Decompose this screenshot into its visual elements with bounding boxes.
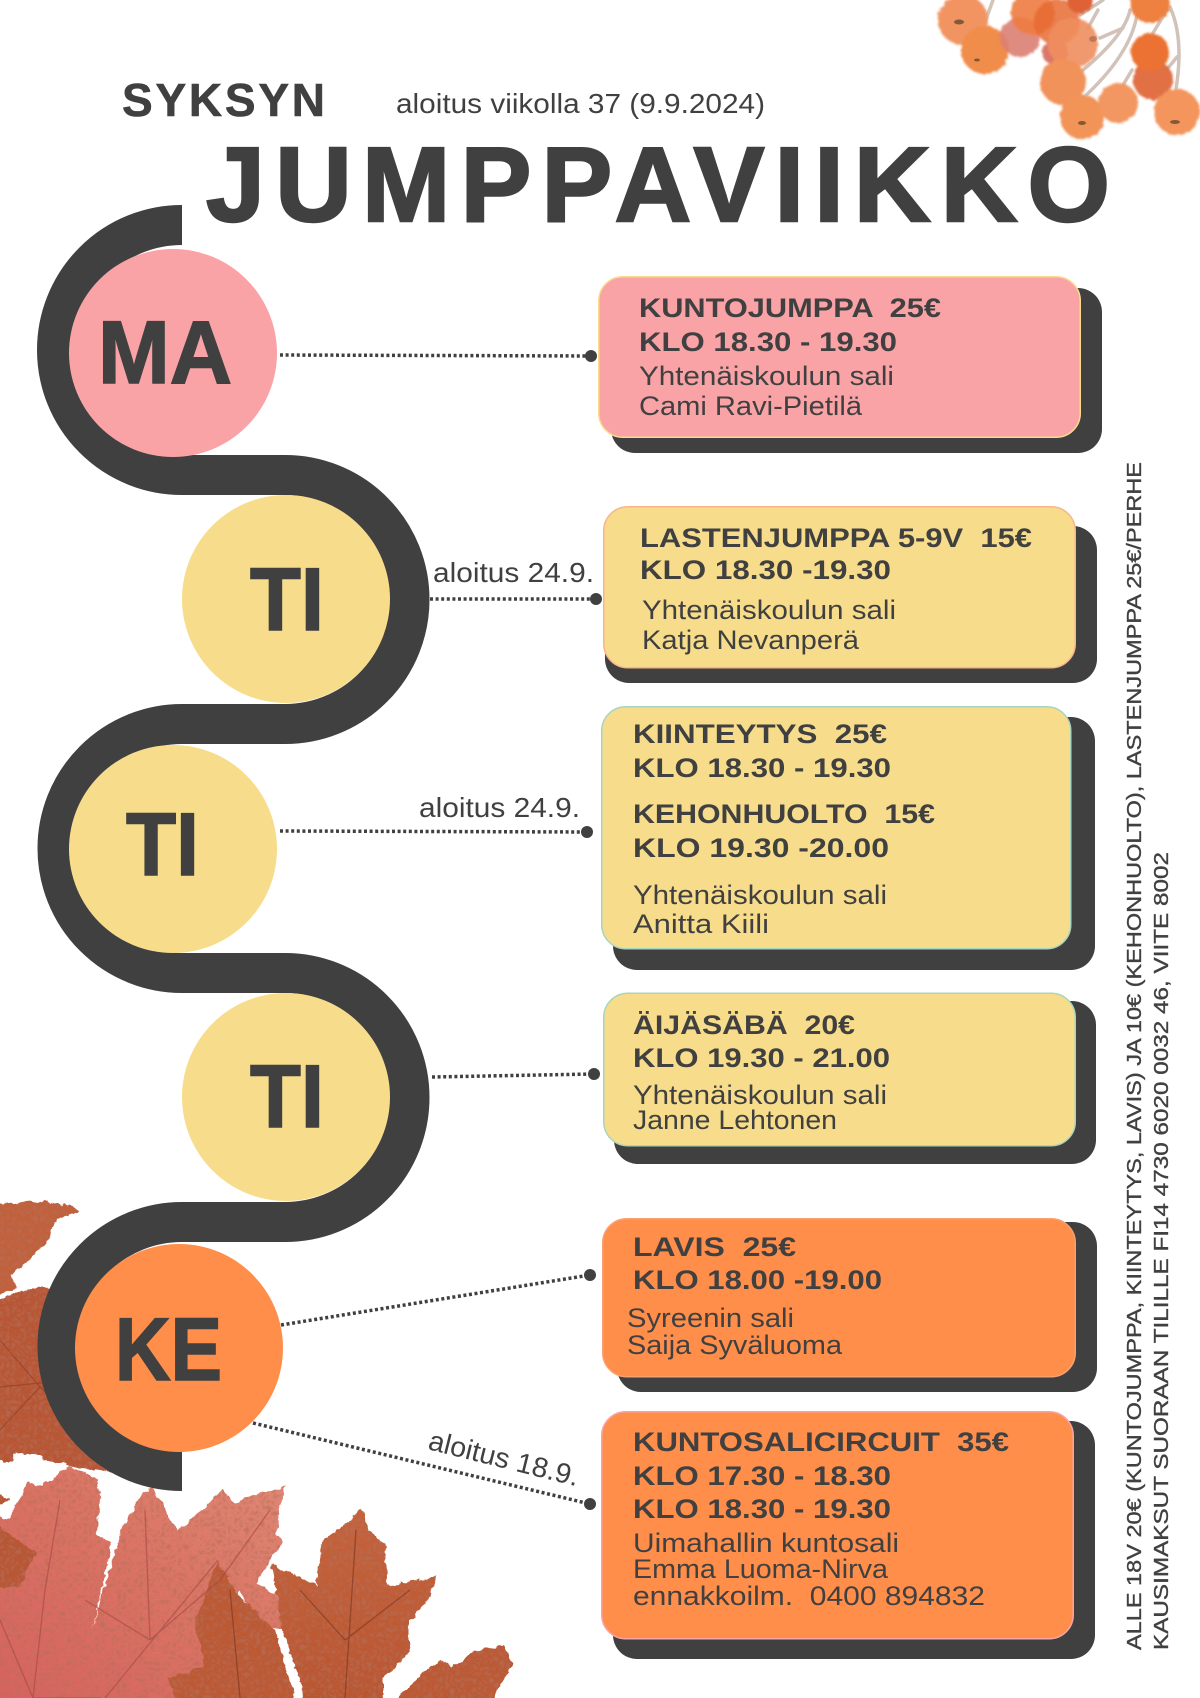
panel: kiinteytys ja kehonhuolto: Yhtenäiskoulun sali [633, 880, 887, 910]
day circle: TI third [182, 993, 390, 1201]
connector: MA to kuntojumppa [280, 350, 597, 362]
day circle: TI first [182, 495, 390, 703]
panel: kuntosalicircuit: KUNTOSALICIRCUIT 35€ [633, 1427, 1009, 1457]
panel: lastenjumppa: KLO 18.30 -19.30 [640, 555, 891, 585]
start label: lastenjumppa: aloitus 24.9. [433, 557, 594, 588]
panel: kiinteytys ja kehonhuolto: KEHONHUOLTO 15€ [633, 799, 935, 829]
day circle: TI first: TI [250, 549, 324, 649]
day circle: MA: MA [98, 302, 232, 402]
connector: TI to kiinteytys [280, 826, 593, 838]
panel: lastenjumppa: Yhtenäiskoulun sali [642, 595, 896, 625]
panel: aijasaba: ÄIJÄSÄBÄ 20€ [633, 1010, 855, 1040]
panel: kuntosalicircuit: Uimahallin kuntosali [633, 1528, 899, 1558]
panel: kuntojumppa: Yhtenäiskoulun sali [639, 361, 894, 391]
heading: SYKSYN: SYKSYN [122, 74, 325, 126]
panel: lavis: LAVIS 25€ [633, 1232, 796, 1262]
panel: kuntosalicircuit: KLO 17.30 - 18.30 [633, 1461, 891, 1491]
title: JUMPPAVIIKKO: JUMPPAVIIKKO [206, 126, 1110, 244]
panel: aijasaba: KLO 19.30 - 21.00 [633, 1043, 890, 1073]
panel: kuntojumppa [599, 277, 1102, 453]
panel: kiinteytys ja kehonhuolto: KLO 18.30 - 19.30 [633, 753, 891, 783]
decoration: rowan berries top right [938, 0, 1200, 139]
panel: lastenjumppa: Katja Nevanperä [642, 625, 860, 655]
side note: pricing and payment: KAUSIMAKSUT SUORAAN TILILLE FI14 4730 6020 0032 46, VIITE 8002 [1151, 852, 1173, 1650]
leaves: autumn maple leaves bottom left [0, 1192, 513, 1698]
panel: kuntosalicircuit: Emma Luoma-Nirva [633, 1554, 889, 1584]
panel: kuntojumppa: KLO 18.30 - 19.30 [639, 327, 897, 357]
panel: kuntosalicircuit [602, 1412, 1095, 1659]
side note: pricing and payment: ALLE 18V 20€ (KUNTOJUMPPA, KIINTEYTYS, LAVIS) JA 10€ (KEHONHUOLTO), LASTENJUMPPA 25€/PERHE [1124, 462, 1146, 1650]
berry seeds [954, 20, 1180, 125]
panel: lastenjumppa: LASTENJUMPPA 5-9V 15€ [640, 523, 1032, 553]
panel: aijasaba: Janne Lehtonen [633, 1105, 837, 1135]
connector: KE to kuntosalicircuit [253, 1423, 596, 1510]
connector: KE to lavis [281, 1269, 596, 1325]
day circle: KE [75, 1244, 283, 1452]
panel: kuntojumppa: KUNTOJUMPPA 25€ [639, 293, 941, 323]
panel: lavis: KLO 18.00 -19.00 [633, 1265, 882, 1295]
connector: TI to aijasaba [432, 1068, 600, 1080]
subheading: start week: aloitus viikolla 37 (9.9.2024) [396, 88, 765, 119]
day circle: TI second [69, 745, 277, 953]
winding dark path [57, 225, 409, 1471]
start label: kuntosalicircuit: aloitus 18.9. [426, 1425, 582, 1492]
day circle: KE: KE [115, 1299, 222, 1399]
panel: lavis: Saija Syväluoma [627, 1330, 843, 1360]
day circle: TI third: TI [250, 1046, 324, 1146]
panel: kiinteytys ja kehonhuolto: Anitta Kiili [633, 909, 769, 939]
panel: kiinteytys ja kehonhuolto: KIINTEYTYS 25€ [633, 719, 887, 749]
panel: kuntojumppa: Cami Ravi-Pietilä [639, 391, 863, 421]
panel: aijasaba [604, 993, 1096, 1164]
start label: kiinteytys: aloitus 24.9. [419, 792, 580, 823]
panel: kuntosalicircuit: KLO 18.30 - 19.30 [633, 1494, 891, 1524]
day circle: MA [69, 249, 277, 457]
day circle: TI second: TI [126, 794, 199, 894]
side note: pricing and payment [1124, 462, 1173, 1650]
panel: lavis: Syreenin sali [627, 1303, 794, 1333]
panel: lavis [603, 1219, 1097, 1392]
connector: TI to lastenjumppa [430, 593, 602, 605]
panel: kuntosalicircuit: ennakkoilm. 0400 894832 [633, 1581, 985, 1611]
panel: kiinteytys ja kehonhuolto [602, 707, 1095, 970]
stems [985, 0, 1179, 98]
panel: lastenjumppa [604, 507, 1097, 683]
panel: kiinteytys ja kehonhuolto: KLO 19.30 -20.00 [633, 833, 889, 863]
panel: aijasaba: Yhtenäiskoulun sali [633, 1080, 887, 1110]
